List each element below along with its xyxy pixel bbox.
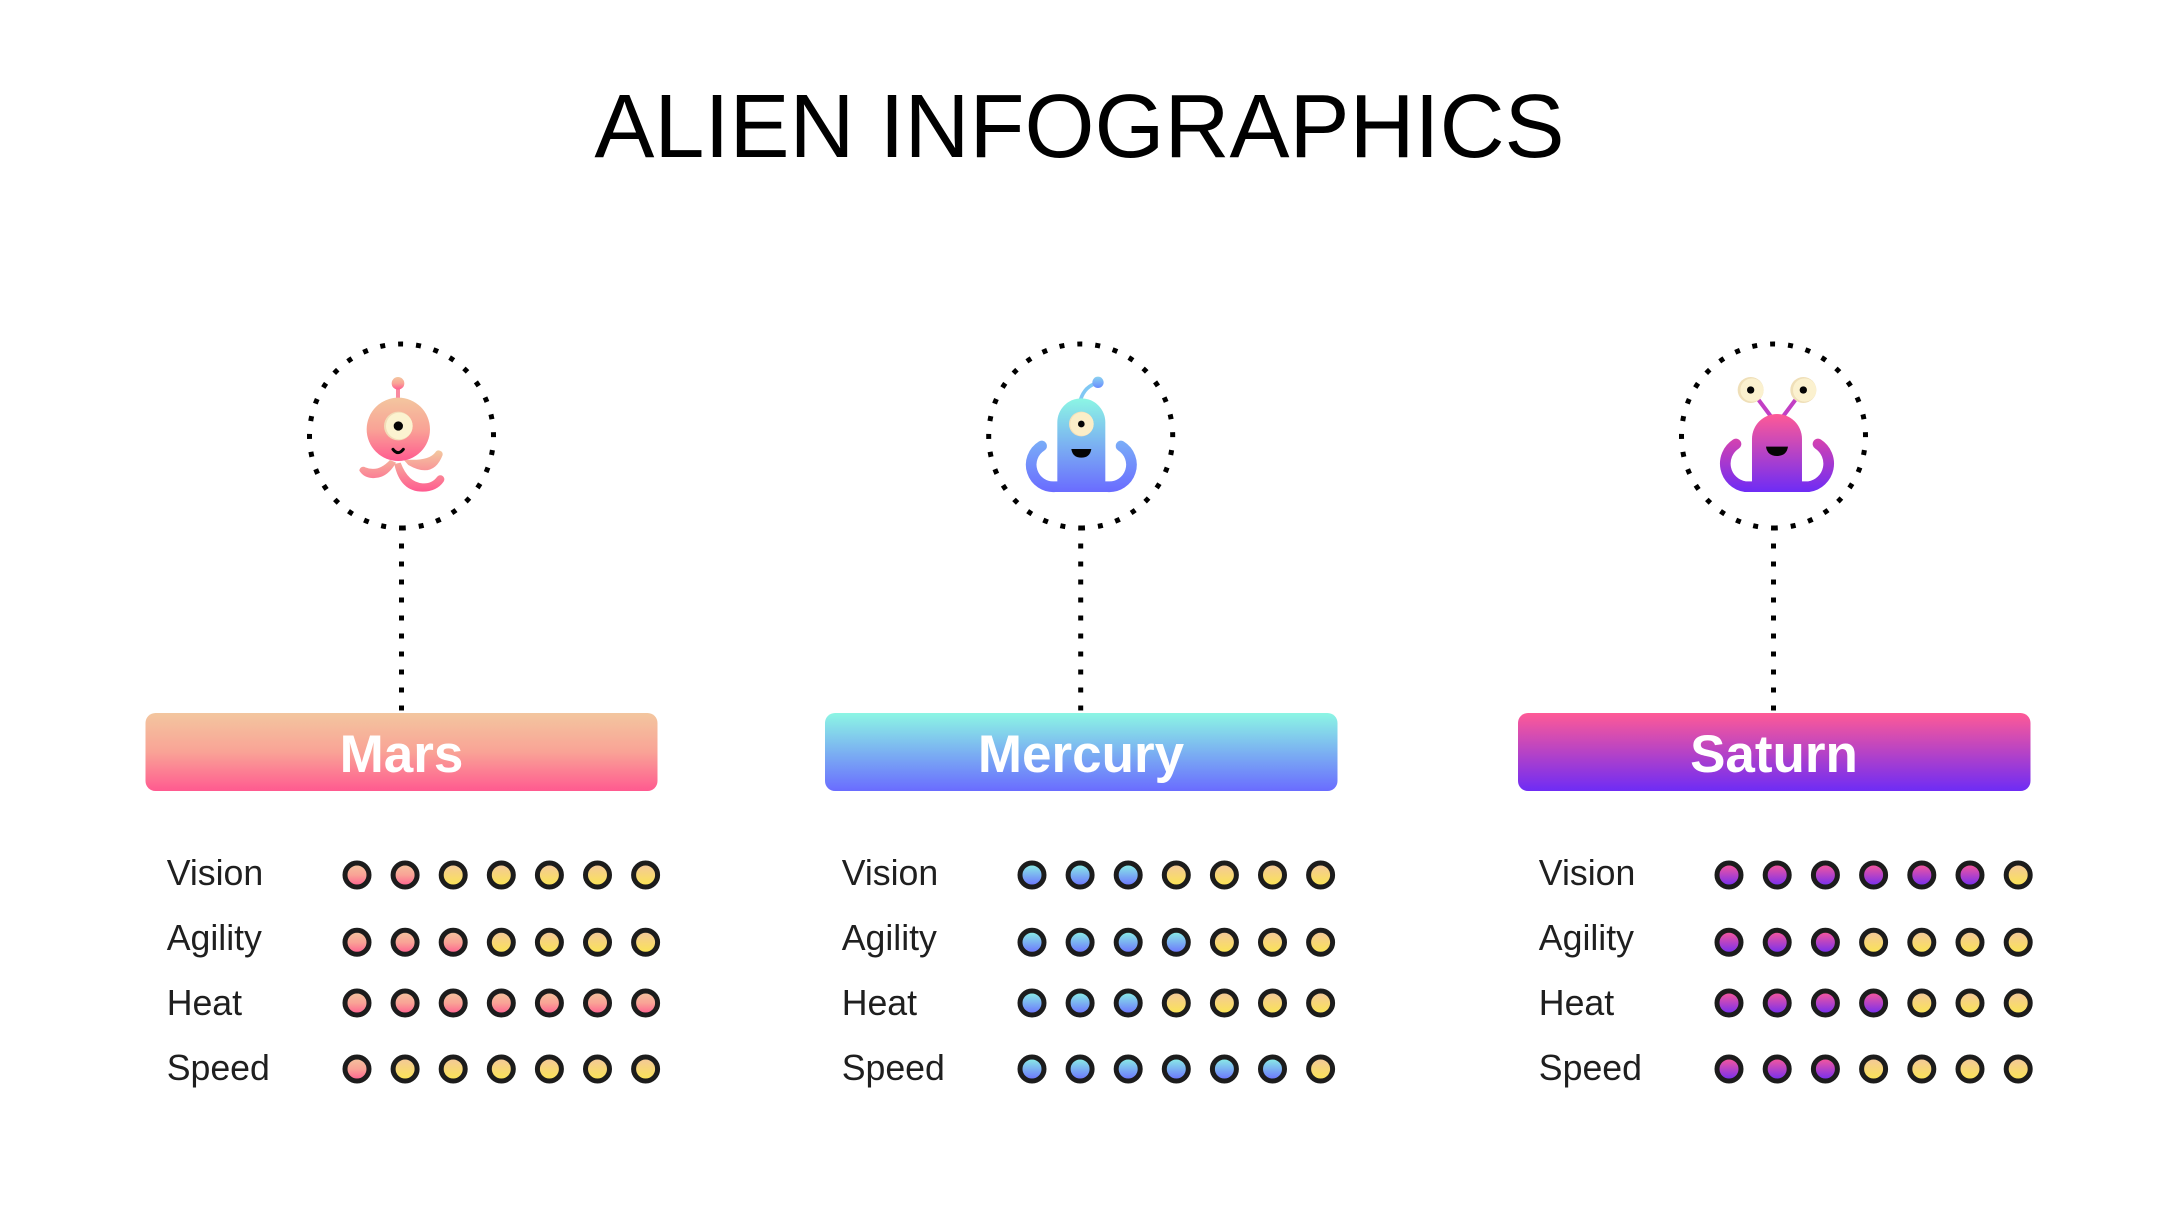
- label: Vision: Vision: [842, 853, 938, 893]
- icon: Saturn alien: [1725, 377, 1829, 492]
- dotted circle: Saturn: [1682, 344, 1866, 528]
- title: ALIEN INFOGRAPHICS: [594, 77, 1565, 177]
- header bar: Mars: [146, 713, 658, 791]
- rating dots: Speed: [345, 1057, 658, 1081]
- dotted circle: Mars: [310, 344, 494, 528]
- dotted connector: Mars: [399, 544, 404, 711]
- dotted circle: Mercury: [989, 344, 1173, 528]
- heading: Mercury: Mercury: [978, 725, 1185, 784]
- rating dots: Speed: [1020, 1057, 1333, 1081]
- dotted connector: Mercury: [1078, 544, 1083, 711]
- label: Speed: Speed: [1539, 1048, 1642, 1088]
- label: Heat: Heat: [842, 983, 917, 1023]
- rating dots: Vision: [1717, 863, 2030, 887]
- label: Speed: Speed: [167, 1048, 270, 1088]
- rating dots: Vision: [345, 863, 658, 887]
- rating dots: Heat: [345, 991, 658, 1015]
- panel: Mars: [146, 344, 658, 1088]
- dotted connector: Saturn: [1771, 544, 1776, 711]
- icon: Mars alien: [359, 377, 444, 492]
- label: Vision: Vision: [167, 853, 263, 893]
- rating dots: Agility: [1717, 930, 2030, 954]
- rating dots: Agility: [345, 930, 658, 954]
- rating dots: Agility: [1020, 930, 1333, 954]
- label: Heat: Heat: [167, 983, 242, 1023]
- icon: Mercury alien: [1031, 377, 1131, 492]
- label: Agility: Agility: [167, 918, 262, 958]
- heading: Saturn: Saturn: [1690, 725, 1858, 784]
- panel: Saturn: [1518, 344, 2030, 1088]
- label: Heat: Heat: [1539, 983, 1614, 1023]
- label: Speed: Speed: [842, 1048, 945, 1088]
- rating dots: Heat: [1717, 991, 2030, 1015]
- heading: Mars: Mars: [340, 725, 463, 784]
- label: Vision: Vision: [1539, 853, 1635, 893]
- panel: Mercury: [825, 344, 1338, 1088]
- label: Agility: Agility: [1539, 918, 1634, 958]
- label: Agility: Agility: [842, 918, 937, 958]
- rating dots: Heat: [1020, 991, 1333, 1015]
- header bar: Mercury: [825, 713, 1338, 791]
- rating dots: Vision: [1020, 863, 1333, 887]
- header bar: Saturn: [1518, 713, 2030, 791]
- rating dots: Speed: [1717, 1057, 2030, 1081]
